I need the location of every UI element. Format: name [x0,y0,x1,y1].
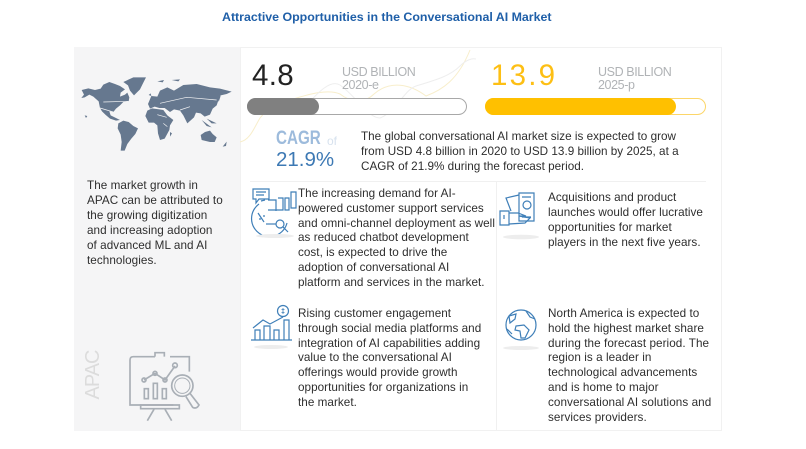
text: customer engagement: through social media platforms and [298,322,481,335]
text: APAC growth drivers: and increasing adoption [87,224,212,237]
text: AI-powered demand driver: and omni-channel deployment as well [298,217,495,230]
icon: world map [81,77,232,151]
text: AI-powered demand driver: platform and services in the market. [298,276,485,289]
text: customer engagement: integration of AI capabilities adding [298,337,480,350]
CAGR callout [276,128,337,171]
panel: right content outline [240,47,722,431]
text: APAC growth drivers: the growing digitization [87,209,207,222]
unit: USD billion 2020-e: 2020-e [342,78,379,92]
CAGR callout: of [327,134,337,148]
text: APAC growth drivers: technologies. [87,254,157,267]
value: 4.8: 4.8 [252,59,294,92]
text: customer engagement: Rising customer engagement [298,307,451,320]
icon: customer support analytics [250,188,297,238]
decorative wave lines [240,50,476,142]
text: customer engagement: offerings would provide growth [298,366,458,379]
icon: hand holding money [499,192,539,240]
text: acquisitions and launches: players in the next five years. [548,236,701,249]
text: market summary: CAGR of 21.9% during the forecast period. [361,160,584,173]
text: AI-powered demand driver: cost, is expected to drive the [298,246,447,259]
text: market summary: The global conversational AI market size is expected to grow [361,130,676,143]
label: APAC: APAC [82,351,104,400]
text: APAC growth drivers [87,179,223,267]
text: AI-powered demand driver: as reduced chatbot development [298,231,469,244]
value: 13.9: 13.9 [491,59,557,92]
text: acquisitions and launches: launches would offer lucrative [548,206,703,219]
unit: USD billion 2020-e: USD BILLION [342,65,415,79]
text: North America outlook: region is a leader in [548,351,651,364]
text: customer engagement: opportunities for organizations in [298,381,468,394]
text: AI-powered demand driver: The increasing demand for AI- [298,187,456,200]
text: North America outlook: and is home to major [548,381,659,394]
icon: presentation board with magnifier [129,352,200,421]
text: customer engagement [298,307,481,409]
text: acquisitions and launches: opportunities for market [548,221,672,234]
text: North America outlook [548,307,711,424]
text: APAC growth drivers: The market growth in [87,179,198,192]
icon: globe [503,309,539,350]
text: AI-powered demand driver: powered customer support services [298,202,484,215]
text: AI-powered demand driver: adoption of conversational AI [298,261,449,274]
text: acquisitions and launches: Acquisitions and product [548,191,676,204]
stat: 2025 market size [485,59,706,115]
text: North America outlook: during the forecast period. The [548,337,709,350]
text: North America outlook: North America is expected to [548,307,699,320]
text: North America outlook: hold the highest market share [548,322,704,335]
title: Attractive Opportunities in the Conversational AI Market [222,10,551,24]
panel: left APAC sidebar [74,47,240,431]
text: APAC growth drivers: of advanced ML and AI [87,239,207,252]
bar: 2025 value [485,98,706,115]
text: North America outlook: conversational AI solutions and [548,396,711,409]
stat: 2020 market size [247,59,467,115]
unit: USD billion 2025-p [598,65,671,92]
unit: USD billion 2020-e [342,65,415,92]
unit: USD billion 2025-p: 2025-p [598,78,635,92]
text: market summary: from USD 4.8 billion in 2020 to USD 13.9 billion by 2025, at a [361,145,679,158]
text: customer engagement: value to the conversational AI [298,351,452,364]
text: AI-powered demand driver [298,187,495,289]
CAGR callout: 21.9% [276,148,334,171]
text: North America outlook: services providers. [548,411,647,424]
text: acquisitions and launches [548,191,703,249]
unit: USD billion 2025-p: USD BILLION [598,65,671,79]
text: customer engagement: the market. [298,396,357,409]
bar: 2020 value [247,98,467,115]
text: APAC growth drivers: APAC can be attributed to [87,194,223,207]
text: market summary [361,130,679,173]
text: North America outlook: technological advancements [548,366,697,379]
CAGR callout: CAGR [276,128,321,149]
icon: growth chart with coin [251,304,292,349]
